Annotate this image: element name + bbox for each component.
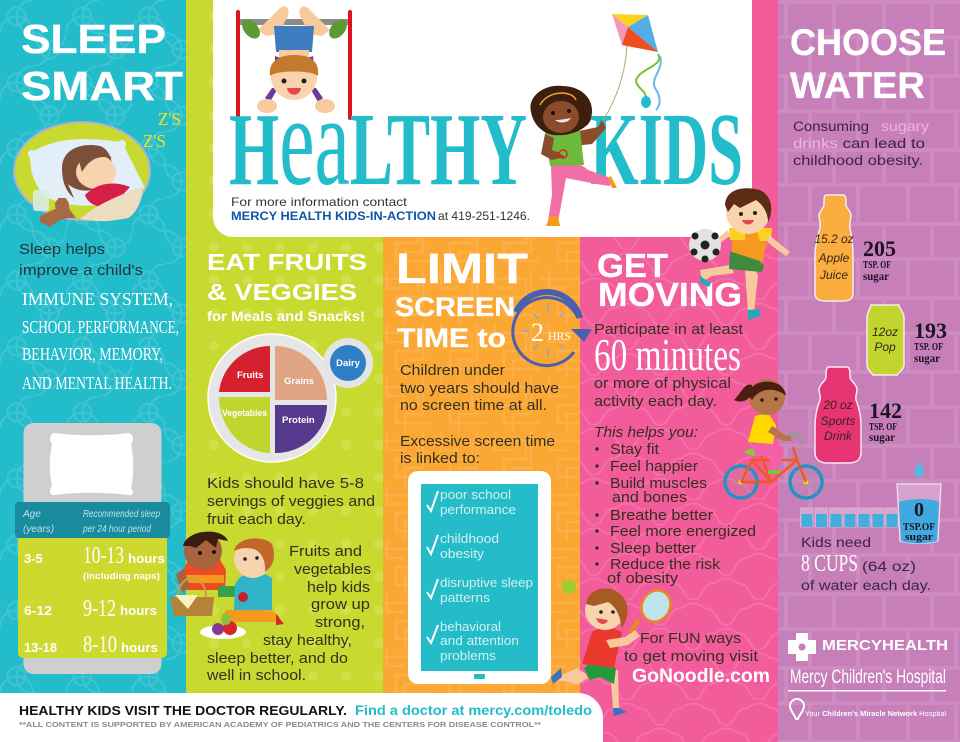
water cups text: 8 CUPS <box>801 551 858 577</box>
fruit benefits text <box>206 544 371 684</box>
checklist text: poor school <box>440 488 511 502</box>
benefits list: Feel happier <box>610 459 698 475</box>
water cups text: Kids need <box>801 535 871 550</box>
stat: 205 tsp: 205 <box>863 236 896 261</box>
icon: pillow <box>50 433 133 495</box>
benefits list: Sleep better <box>610 541 696 557</box>
logo: mercy health: MERCYHEALTH <box>822 637 948 654</box>
bottle: apple juice: 15.2 oz <box>814 232 854 246</box>
table header <box>15 502 170 538</box>
row: ages 13-18: hours <box>121 640 158 655</box>
icon: two hour clock <box>513 292 592 366</box>
checklist text: behavioral <box>440 620 501 634</box>
row: ages 6-12: 6-12 <box>24 603 52 618</box>
icon: glass of water: 0 <box>914 499 924 521</box>
gonoodle text: GoNoodle.com <box>632 666 770 687</box>
icon: sleeping girl <box>14 122 150 227</box>
water intro text <box>793 119 929 168</box>
stat: 142 tsp: sugar <box>869 430 896 444</box>
benefits list: Reduce the risk <box>610 557 721 573</box>
stat: 142 tsp: TSP. OF <box>869 422 897 433</box>
icon: boy with soccer ball <box>689 188 790 320</box>
gonoodle text <box>624 631 770 687</box>
icon: two hour clock: 2 <box>531 318 544 347</box>
logo: mercy health <box>788 633 948 661</box>
panel: fruits and veggies background <box>186 0 383 693</box>
water intro text: Consuming <box>793 119 869 134</box>
panel: get moving background <box>580 0 778 742</box>
sleep text: Sleep helps <box>19 242 105 258</box>
icon: picnic kids <box>170 532 284 639</box>
benefits list: Stay fit <box>610 442 659 458</box>
z's: Z'S <box>143 131 166 151</box>
screen time text: Children under <box>400 363 505 379</box>
panel: choose water background <box>778 0 960 742</box>
icon: tennis boy <box>551 580 676 716</box>
stat: 205 tsp <box>863 236 896 283</box>
screen time text: Excessive screen time <box>400 434 555 450</box>
screen time heading: LIMIT <box>396 245 528 293</box>
screen time text: is linked to: <box>400 451 480 467</box>
checklist text: performance <box>440 503 516 517</box>
moving text <box>594 322 743 410</box>
water cups text: of water each day. <box>801 578 931 593</box>
table header: Age <box>22 509 41 520</box>
z's <box>143 109 181 151</box>
row: ages 3-5: 3-5 <box>24 551 43 566</box>
benefits list: Feel more energized <box>610 524 756 540</box>
water intro text: childhood obesity. <box>793 153 923 168</box>
water heading: WATER <box>790 65 925 106</box>
screen time text: two years should have <box>400 381 559 397</box>
chart: myplate <box>208 334 373 462</box>
stat: 142 tsp: 142 <box>869 398 902 423</box>
bottle: sports drink: Drink <box>824 429 853 443</box>
fruit benefits text: help kids <box>307 580 370 596</box>
can: pop: Pop <box>874 340 896 354</box>
benefits list: Build muscles <box>610 476 707 492</box>
water intro text: sugary <box>881 119 929 134</box>
benefits list: of obesity <box>607 571 679 587</box>
benefits list: and bones <box>612 490 687 506</box>
title: healthy kids: HeaLTHY <box>229 70 527 212</box>
row: ages 13-18: 13-18 <box>24 640 57 655</box>
panel: sleep smart background <box>0 0 186 693</box>
stat: 193 tsp: TSP. OF <box>914 342 943 353</box>
moving text: Participate in at least <box>594 322 743 338</box>
chart: myplate: Dairy <box>336 358 361 369</box>
bottle: sports drink: Sports <box>821 414 855 428</box>
checklist text: problems <box>440 649 496 663</box>
contact text: at 419-251-1246. <box>438 209 530 223</box>
table rows <box>18 530 167 658</box>
fruits heading: for Meals and Snacks! <box>207 308 365 324</box>
chart: myplate: Protein <box>282 415 315 426</box>
stat: 205 tsp: TSP. OF <box>863 260 891 271</box>
gonoodle text: to get moving visit <box>624 649 758 665</box>
checklist text: and attention <box>440 634 519 648</box>
stat: 193 tsp: 193 <box>914 318 947 343</box>
fruit benefits text: sleep better, and do <box>207 651 348 667</box>
panel: screen time background <box>383 237 580 693</box>
benefits list: This helps you: <box>594 425 698 441</box>
row: ages 13-18 <box>24 632 158 658</box>
bottle: sports drink: 20 oz <box>822 398 853 412</box>
screen time heading: SCREEN <box>395 292 515 322</box>
water heading <box>790 22 946 106</box>
checks <box>427 491 438 643</box>
banner text <box>19 703 592 729</box>
fruits heading <box>207 249 367 324</box>
water cups text <box>801 535 931 593</box>
row: ages 3-5: hours <box>128 551 165 566</box>
sleep heading: SMART <box>21 63 183 109</box>
sleep text: SCHOOL PERFORMANCE, <box>22 317 179 337</box>
icon: girl on bicycle <box>725 379 822 498</box>
sleep text: IMMUNE SYSTEM, <box>22 289 173 309</box>
moving text: or more of physical <box>594 376 731 392</box>
bottle: apple juice: Juice <box>819 268 848 282</box>
row: ages 3-5 <box>24 543 165 581</box>
checklist text: childhood <box>440 532 499 546</box>
icon: two hour clock: HRS <box>548 329 571 343</box>
screen time text <box>400 363 559 467</box>
bottle: apple juice <box>814 195 854 301</box>
table header: per 24 hour period <box>82 524 151 535</box>
moving text: activity each day. <box>594 394 717 410</box>
moving heading <box>597 247 742 313</box>
stat: 142 tsp <box>869 398 902 444</box>
icon: boy hanging from bar <box>236 6 352 120</box>
bottle: apple juice: Apple <box>818 251 850 265</box>
screen time heading: TIME to <box>397 323 506 353</box>
sleep text: improve a child's <box>19 263 143 279</box>
checklist text: disruptive sleep <box>440 576 533 590</box>
stat: 193 tsp: sugar <box>914 351 941 365</box>
fruit benefits text: stay healthy, <box>263 633 352 649</box>
stat: 205 tsp: sugar <box>863 269 890 283</box>
contact text <box>231 195 530 223</box>
table header: (years) <box>23 524 54 535</box>
fruit servings text: servings of veggies and <box>207 494 375 510</box>
fruit benefits text: well in school. <box>206 668 306 684</box>
icon: water drop <box>914 461 924 477</box>
sleep text <box>19 242 179 393</box>
can: pop: 12oz <box>872 325 898 339</box>
icon: glass of water: TSP.OF <box>903 522 935 533</box>
sleep heading <box>21 16 183 109</box>
banner text: HEALTHY KIDS VISIT THE DOCTOR REGULARLY. <box>19 703 347 718</box>
screen time heading <box>395 245 528 353</box>
contact text: For more information contact <box>231 195 408 209</box>
sleep text: AND MENTAL HEALTH. <box>22 373 172 393</box>
fruits heading: EAT FRUITS <box>207 249 367 275</box>
icon: glass of water: sugar <box>905 531 933 543</box>
sleep table as bed <box>15 423 170 674</box>
logo: children's miracle network: Your Children's Miracle Network Hospital <box>805 709 946 718</box>
can: pop <box>867 305 904 375</box>
z's: Z'S <box>158 109 181 129</box>
logo: children's miracle network <box>790 699 946 719</box>
checklist text <box>440 488 533 663</box>
fruit benefits text: strong, <box>315 615 365 631</box>
row: ages 6-12: 9-12 <box>83 596 116 622</box>
stat: 193 tsp <box>914 318 947 365</box>
row: ages 3-5: 10-13 <box>83 543 124 569</box>
row: ages 3-5: (including naps) <box>83 571 160 581</box>
fruit servings text: fruit each day. <box>207 512 306 528</box>
sleep heading: SLEEP <box>21 16 166 62</box>
fruit servings text: Kids should have 5-8 <box>207 476 364 492</box>
contact text: MERCY HEALTH KIDS-IN-ACTION <box>231 209 436 223</box>
soccer ball <box>689 229 721 262</box>
icon: kite <box>596 14 661 130</box>
tennis ball <box>562 580 576 594</box>
fruits heading: & VEGGIES <box>207 279 357 305</box>
panel: bottom doctor banner <box>0 693 603 742</box>
table header: Recommended sleep <box>83 509 160 520</box>
icon: glass of water <box>897 484 941 543</box>
fruit benefits text: vegetables <box>294 562 371 578</box>
fruit benefits text: grow up <box>311 597 370 613</box>
fruit benefits text: Fruits and <box>289 544 362 560</box>
moving text: 60 minutes <box>594 329 741 380</box>
sleep text: BEHAVIOR, MEMORY, <box>22 344 163 364</box>
panel: healthy kids header <box>213 0 752 237</box>
benefits list <box>594 425 756 587</box>
water intro text: drinks can lead to <box>793 136 925 151</box>
banner text: **ALL CONTENT IS SUPPORTED BY AMERICAN ACADEMY OF PEDIATRICS AND THE CENTERS FOR DISEASE CONTROL** <box>19 720 541 729</box>
chart: myplate: Vegetables <box>222 408 267 419</box>
title: healthy kids: KIDS <box>590 92 743 207</box>
screen time text: no screen time at all. <box>400 398 547 414</box>
chart: myplate: Grains <box>284 376 314 387</box>
bottle: sports drink <box>815 367 861 463</box>
water heading: CHOOSE <box>790 22 946 63</box>
chart: myplate: Fruits <box>237 370 263 381</box>
gonoodle text: For FUN ways <box>640 631 741 647</box>
icon: tablet with checklist <box>408 471 551 684</box>
icon: seven cups <box>800 508 898 527</box>
row: ages 6-12 <box>24 596 157 622</box>
banner text: Find a doctor at mercy.com/toledo <box>355 703 592 718</box>
moving heading: GET <box>597 247 668 284</box>
row: ages 6-12: hours <box>120 603 157 618</box>
moving heading: MOVING <box>598 276 742 313</box>
icon: girl flying kite <box>530 86 617 226</box>
checklist text: patterns <box>440 591 490 605</box>
checklist text: obesity <box>440 547 485 561</box>
water cups text: (64 oz) <box>862 559 916 574</box>
fruit servings text <box>207 476 375 528</box>
row: ages 13-18: 8-10 <box>83 632 117 658</box>
benefits list: Breathe better <box>610 508 713 524</box>
